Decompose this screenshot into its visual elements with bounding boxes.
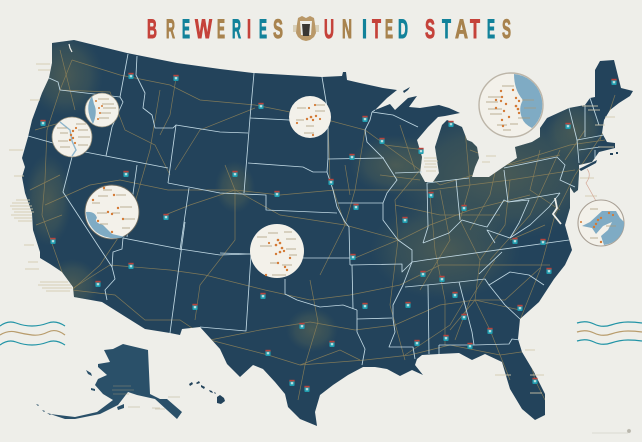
title: N: [342, 14, 352, 44]
coastal and lake city labels: [9, 64, 615, 393]
title: E: [259, 14, 267, 44]
inset: Twin Cities area: [289, 96, 331, 138]
inset: Colorado Front Range: [250, 224, 304, 278]
title: D: [398, 14, 408, 44]
icon: brewery crest with pint glass: [293, 16, 319, 41]
state borders: [28, 54, 604, 365]
title: W: [195, 14, 212, 44]
inset: Lake Michigan shore: [479, 73, 543, 137]
title: S: [425, 14, 435, 44]
title: S: [273, 14, 283, 44]
title: T: [372, 14, 381, 44]
Long Island: [579, 160, 597, 171]
inset: Portland area: [52, 117, 92, 157]
highway shields: [40, 73, 617, 392]
title: B: [147, 14, 157, 44]
title: A: [455, 14, 468, 44]
wave lines: left: [0, 322, 65, 345]
title: R: [166, 14, 175, 44]
credit mark: [592, 429, 631, 433]
brewery-density tint: [24, 33, 615, 352]
Puget Sound: [69, 44, 72, 52]
title: E: [487, 14, 495, 44]
inset: New York City area: [578, 200, 624, 246]
Nantucket and Isle Royale: [403, 87, 618, 155]
connector: New York inset: [586, 169, 596, 201]
title: E: [217, 14, 225, 44]
title: R: [232, 14, 241, 44]
infographic poster: S: [502, 14, 511, 44]
highway network: [30, 50, 615, 400]
Alaska labels: [112, 386, 180, 409]
inset: Seattle area: [85, 93, 119, 127]
title: T: [470, 14, 480, 44]
Chesapeake Bay: [553, 198, 561, 224]
wave lines: right: [577, 322, 642, 344]
title: I: [247, 14, 251, 44]
title: [147, 14, 511, 44]
Hawaii: [189, 381, 225, 404]
title: T: [442, 14, 451, 44]
inset: Northern California: [85, 185, 139, 239]
title: E: [182, 14, 190, 44]
Alaska: [36, 344, 182, 419]
title: I: [362, 14, 367, 44]
title: E: [385, 14, 393, 44]
title: U: [324, 14, 334, 44]
